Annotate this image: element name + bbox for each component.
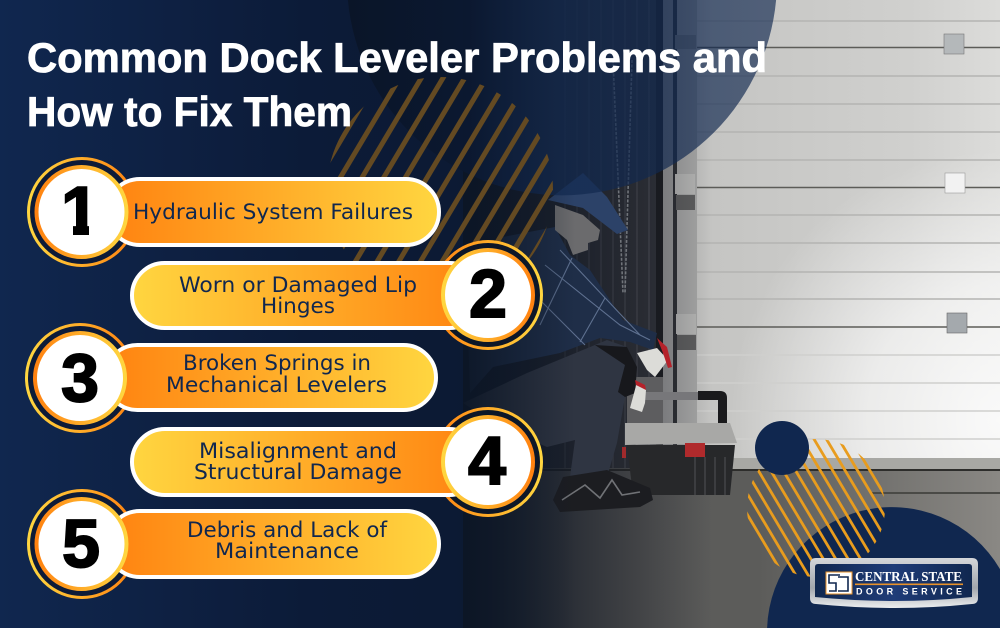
item 1 <box>28 158 439 266</box>
cap <box>548 173 628 234</box>
title: Common Dock Leveler Problems and <box>27 34 767 81</box>
translucent top circle <box>348 0 776 195</box>
knee patch <box>595 345 637 397</box>
item 5 <box>28 490 439 598</box>
door hinges <box>675 34 967 350</box>
top diagonal stripes <box>330 77 553 261</box>
item 5: Debris and Lack of <box>187 518 387 543</box>
logo: Central State Door Service <box>810 558 978 608</box>
small navy circle <box>755 421 809 475</box>
item 4: Structural Damage <box>194 460 402 485</box>
item 2: Hinges <box>261 294 335 319</box>
item 1: 1 <box>61 173 99 249</box>
gloves <box>637 348 668 377</box>
title: How to Fix Them <box>27 88 352 135</box>
item 1: Hydraulic System Failures <box>133 200 413 225</box>
bottom right navy circle <box>767 507 1000 628</box>
toolbox <box>622 377 737 495</box>
item 2 <box>132 242 542 348</box>
logo: Central State Door Service: DOOR SERVICE <box>856 586 962 596</box>
title <box>27 34 767 135</box>
logo: Central State Door Service: CENTRAL STATE <box>855 570 962 585</box>
item 3: 3 <box>61 340 99 416</box>
torso and arm <box>468 227 657 393</box>
item 4: Misalignment and <box>199 439 397 464</box>
item 2: 2 <box>469 256 507 332</box>
dark fade over worker back <box>463 160 575 628</box>
legs <box>463 340 637 477</box>
item 2: Worn or Damaged Lip <box>179 273 417 298</box>
photo: loading dock door <box>463 0 1000 628</box>
bottom diagonal stripes <box>747 439 885 577</box>
plaid highlights <box>530 250 650 345</box>
logo emblem <box>826 572 852 594</box>
item 3 <box>26 324 436 432</box>
chain <box>613 60 632 293</box>
item 3: Broken Springs in <box>183 351 371 376</box>
dark overlay fading over photo <box>463 0 712 628</box>
item 5: 5 <box>62 506 100 582</box>
worker kneeling with toolbox <box>463 173 737 512</box>
head <box>555 205 600 255</box>
item 5: Maintenance <box>215 539 359 564</box>
shoe <box>553 470 653 512</box>
item 4: 4 <box>468 423 506 499</box>
item 3: Mechanical Levelers <box>166 373 387 398</box>
item 4 <box>132 408 542 516</box>
